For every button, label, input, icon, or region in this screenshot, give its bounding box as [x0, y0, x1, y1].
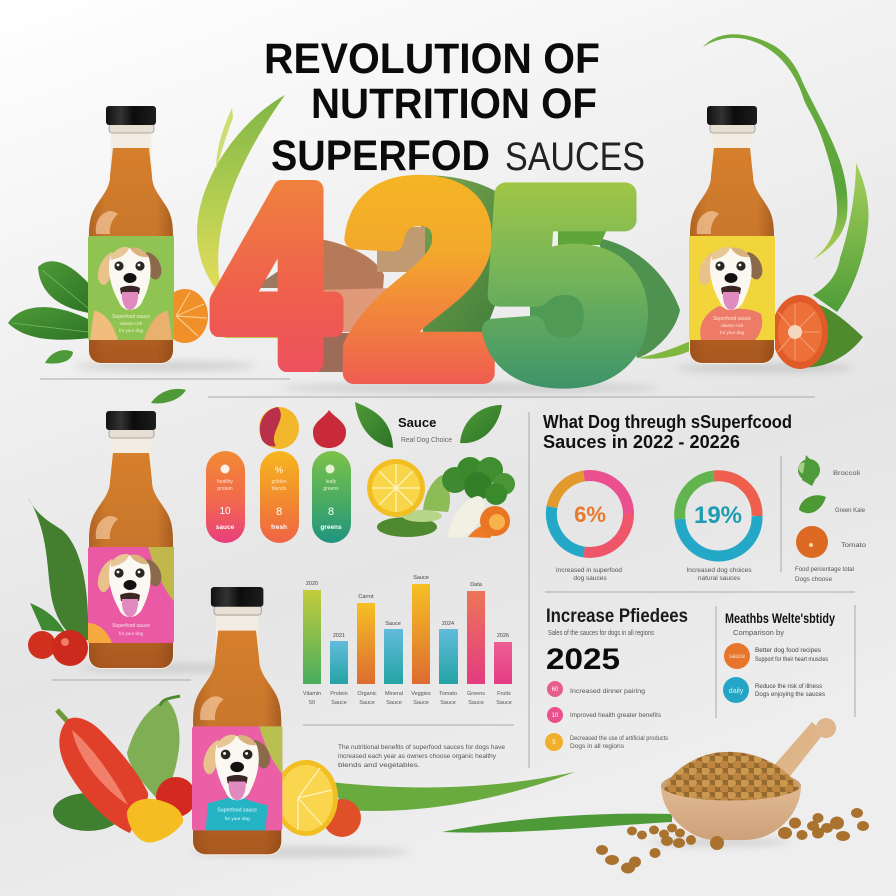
fruit: mango	[259, 407, 299, 449]
list item 3: Decreased the use of artificial products	[570, 735, 669, 742]
bar axis labels	[303, 691, 512, 706]
bar value labels: Sauce	[413, 575, 429, 581]
bar axis labels: Sauce	[359, 700, 375, 706]
bar axis labels: Greens	[467, 691, 485, 697]
label: green: for your dog	[119, 328, 144, 333]
badge orange: Better dog food recipes	[755, 647, 822, 654]
chart paragraph: increased each year as owners choose organic healthy	[338, 753, 497, 760]
icon: spinach	[799, 495, 826, 513]
bar chart	[303, 575, 512, 706]
pill: yellow	[260, 451, 299, 543]
label: pink and teal: for your dog	[225, 816, 250, 821]
pill: green	[312, 451, 351, 543]
red pepper	[57, 710, 148, 833]
title: SUPERFOD	[271, 132, 490, 180]
list item 1	[547, 681, 645, 697]
list item 2	[547, 707, 662, 723]
pill: yellow: golden	[271, 479, 287, 485]
ground shadows	[75, 361, 855, 857]
right swoosh ribbon and blade	[703, 34, 868, 312]
label: yellow: vitamin rich	[721, 323, 744, 328]
bottom grass swooshes	[330, 772, 672, 833]
list item 2: Improved health greater benefits	[570, 712, 662, 719]
chart paragraph: blends and vegetables.	[338, 762, 420, 769]
sauce heading: Real Dog Choice	[401, 437, 452, 444]
badge blue: Dogs enjoying the sauces	[755, 691, 826, 698]
label: pink	[88, 547, 174, 643]
donut chart one: 6%	[574, 502, 606, 527]
bar value labels: 2024	[442, 621, 454, 627]
scattered beans	[596, 808, 869, 874]
list item 2: 10	[552, 713, 559, 719]
bottle: pink label	[88, 411, 174, 669]
donut captions	[556, 567, 752, 582]
label: yellow	[689, 236, 775, 340]
right panel heading: Sauces in 2022 - 20226	[543, 432, 740, 452]
bar value labels: Data	[470, 582, 483, 588]
label: yellow: Superfood sauce	[713, 316, 751, 322]
large 3D number 425: 2	[344, 130, 494, 430]
pill: green: leafy	[326, 479, 337, 485]
bar axis labels: Sauce	[468, 700, 484, 706]
bar axis labels: Sauce	[331, 700, 347, 706]
fruit row	[259, 402, 502, 449]
bottle: green label	[88, 106, 174, 364]
spoon	[770, 718, 836, 784]
list item 1: 60	[552, 687, 559, 693]
icon: broccoli	[798, 455, 820, 486]
bar value labels: 2021	[333, 633, 345, 639]
list item 1: Increased dinner pairing	[570, 688, 645, 695]
side vegetable legend: Green Kale	[835, 507, 865, 514]
bars	[303, 584, 512, 684]
panel: increase	[545, 606, 688, 751]
pill: yellow: 8	[276, 506, 282, 518]
bar axis labels: Sauce	[413, 700, 429, 706]
pill: green: greens	[320, 524, 342, 531]
donut chart one	[551, 476, 628, 552]
bar value labels: Sauce	[385, 621, 401, 627]
right top produce: green fruit, tomato half	[772, 295, 863, 369]
bar axis labels: Fruits	[497, 691, 511, 697]
bottle: pink and teal label	[192, 587, 282, 855]
panel: increase: Sales of the sauces for dogs in all regions	[548, 630, 654, 637]
yellow pepper	[127, 799, 183, 843]
list item 3: 5	[552, 740, 556, 746]
icon: tomato	[796, 526, 828, 558]
panel: healthy study: Comparison by	[733, 630, 785, 637]
label: green: Superfood sauce	[112, 314, 150, 320]
donut chart two	[680, 476, 757, 556]
donut captions: natural sauces	[698, 575, 741, 582]
bar axis labels: Mineral	[385, 691, 403, 697]
pill cards	[206, 451, 351, 543]
bar axis labels: Sauce	[440, 700, 456, 706]
title: NUTRITION OF	[311, 80, 597, 128]
wooden bowl with beans and spoon	[596, 718, 869, 874]
chart paragraph	[338, 744, 505, 769]
pill: orange: protein	[217, 486, 233, 492]
leaf left	[355, 402, 393, 448]
label: pink and teal: Superfood sauce	[217, 808, 257, 814]
pill: yellow: %	[275, 465, 283, 475]
pill: green: 8	[328, 506, 334, 518]
side vegetable legend: Dogs choose	[795, 576, 832, 583]
donut captions: Increased dog choices	[686, 567, 752, 574]
badge orange	[724, 643, 829, 669]
bar axis labels: 50	[309, 700, 315, 706]
pill: orange	[206, 451, 245, 543]
bottle: yellow label	[689, 106, 775, 364]
large 3D number 425	[215, 130, 692, 431]
pill: yellow: blends	[272, 486, 287, 492]
bar axis labels: Veggies	[411, 691, 431, 697]
right panel heading: What Dog threugh sSuperfcood	[543, 412, 792, 432]
label: pink and teal	[192, 726, 282, 830]
small floating leaf	[151, 389, 186, 403]
lemon and tomato at bottle foot	[274, 760, 361, 837]
sauce heading: Sauce	[398, 415, 436, 430]
panel: healthy study: Meathbs Welte'sbtidy	[725, 611, 835, 626]
badge orange: Support for their heart muscles	[755, 656, 829, 663]
panel: increase: Increase Pfiedees	[546, 606, 688, 627]
bottom left vegetables	[53, 696, 196, 843]
pill: orange: 10	[219, 506, 231, 517]
cucumber	[53, 793, 123, 831]
title: REVOLUTION OF	[264, 35, 600, 83]
donut captions: dog sauces	[573, 575, 607, 582]
side vegetable legend: Tomato	[841, 542, 866, 549]
label: pink: Superfood sauce	[112, 623, 150, 629]
bar axis labels: Protein	[330, 691, 348, 697]
label: pink: for your dog	[119, 631, 144, 636]
bar value labels	[306, 575, 509, 639]
list item 3	[545, 733, 669, 751]
vegetable group: lemon, broccoli, carrot, cucumber	[367, 457, 515, 538]
donut chart two: 19%	[694, 502, 742, 529]
3D backing shapes	[220, 175, 692, 372]
divider lines	[40, 379, 855, 768]
left swoosh leaf	[197, 95, 285, 295]
right panel heading	[543, 412, 792, 452]
label: yellow: for your dog	[720, 330, 745, 335]
left top produce: spinach and orange	[8, 261, 208, 364]
vegetables behind third bottle	[28, 497, 88, 666]
bar axis labels: Organic	[357, 691, 377, 697]
bar axis labels: Sauce	[386, 700, 402, 706]
pill: green: greens	[323, 486, 339, 492]
label: green	[88, 236, 174, 340]
badge orange: sauce	[729, 654, 746, 660]
bar value labels: 2020	[306, 581, 318, 587]
bar axis labels: Tomato	[439, 691, 457, 697]
badge blue: Reduce the risk of illness	[755, 683, 823, 690]
title: SAUCES	[505, 135, 645, 179]
leaf right	[460, 405, 502, 443]
bean heap	[664, 752, 800, 802]
pill: orange: healthy	[217, 479, 234, 485]
bar value labels: 2026	[497, 633, 509, 639]
bar value labels: Carrot	[358, 594, 374, 600]
bowl	[661, 787, 801, 840]
side vegetable legend: Food percentage total	[795, 566, 855, 573]
bowl back rim	[661, 769, 801, 803]
panel: healthy study	[723, 611, 835, 703]
panel: increase: 2025	[546, 643, 620, 676]
badge blue: daily	[729, 688, 744, 695]
chart paragraph: The nutritional benefits of superfood sauces for dogs have	[338, 744, 505, 751]
label: green: vitamin rich	[120, 321, 143, 326]
list item 3: Dogs in all regions	[570, 743, 625, 750]
zucchini	[127, 696, 180, 800]
bar axis labels: Vitamin	[303, 691, 321, 697]
pill: orange: sauce	[216, 524, 235, 531]
pill: yellow: fresh	[271, 524, 287, 531]
side vegetable legend: Broccoli	[833, 470, 860, 477]
tomato	[156, 777, 196, 817]
bar axis labels: Sauce	[496, 700, 512, 706]
badge blue	[723, 677, 826, 703]
sauce heading	[398, 415, 452, 444]
large 3D number 425: 5	[485, 136, 644, 431]
side vegetable legend	[795, 455, 866, 583]
fruit: raspberry	[313, 410, 346, 448]
title	[264, 35, 645, 180]
donut captions: Increased in superfood	[556, 567, 622, 574]
large 3D number 425: 4	[215, 136, 336, 415]
